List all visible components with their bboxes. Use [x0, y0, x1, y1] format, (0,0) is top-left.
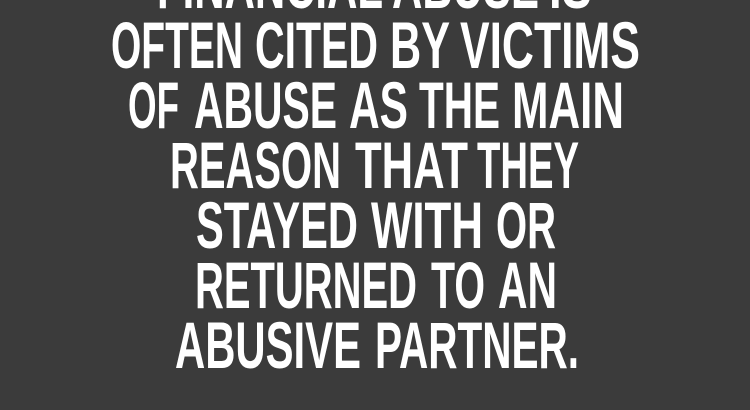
quote text: ABUSE: [194, 68, 337, 142]
quote text: OF: [128, 68, 179, 142]
quote text: MAIN: [512, 68, 624, 142]
quote text: PARTNER.: [375, 308, 579, 382]
quote text: VICTIMS: [460, 8, 640, 82]
quote text: THAT: [355, 128, 468, 202]
quote text: THEY: [477, 128, 579, 202]
quote text: REASON: [170, 128, 341, 202]
quote text: BY: [390, 8, 450, 82]
quote text: [111, 0, 640, 382]
quote text: AS: [349, 68, 408, 142]
quote text: RETURNED: [195, 248, 417, 322]
quote text: TO: [431, 248, 485, 322]
quote text: OR: [496, 188, 556, 262]
quote text: STAYED: [196, 188, 358, 262]
quote text: WITH: [371, 188, 483, 262]
quote text: ABUSIVE: [175, 308, 361, 382]
quote text: OFTEN: [111, 8, 243, 82]
quote text: AN: [498, 248, 557, 322]
quote text: CITED: [255, 8, 378, 82]
quote text: THE: [419, 68, 500, 142]
